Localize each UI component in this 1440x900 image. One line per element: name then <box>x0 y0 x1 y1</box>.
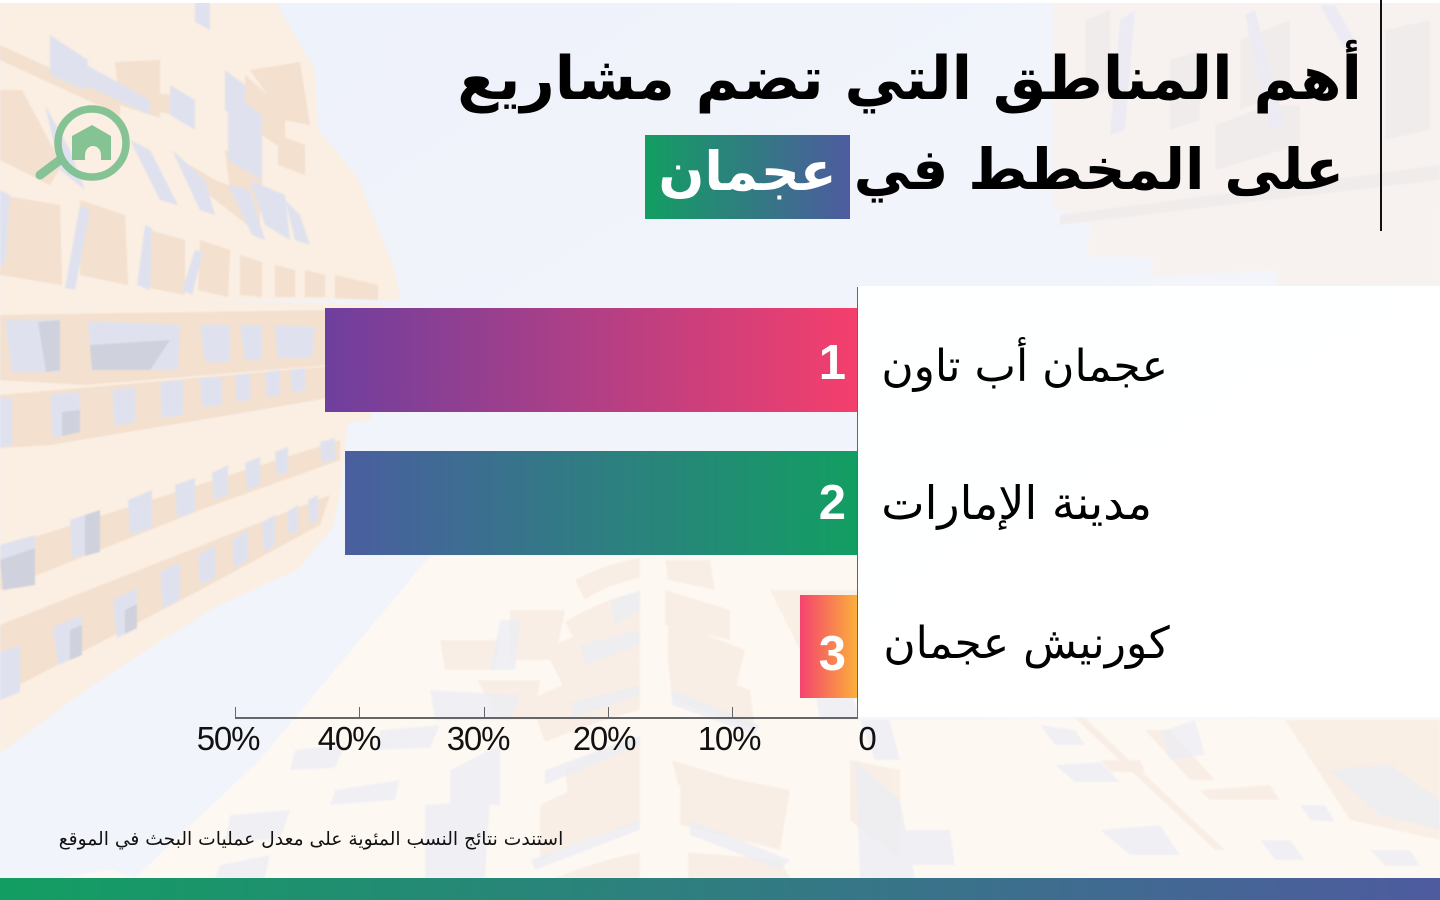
upper left building <box>0 3 400 300</box>
vertical axis line <box>857 287 858 717</box>
axis label 50%: 50% <box>197 720 259 757</box>
title line 1: أهم المناطق التي تضم مشاريع <box>457 45 1362 114</box>
panel: white chart backdrop <box>857 286 1440 717</box>
axis label 20%: 20% <box>573 720 635 757</box>
title <box>457 40 1362 203</box>
axis label 30%: 30% <box>447 720 509 757</box>
bar 2 rank: 2 <box>819 476 846 530</box>
category label 3: كورنيش عجمان <box>883 618 1170 669</box>
sky-side buildings <box>1053 3 1440 285</box>
bar 1 <box>325 308 857 412</box>
row 3 <box>0 535 35 590</box>
title highlight: Ajman: عجمان <box>658 140 837 203</box>
bar 3 rank: 3 <box>819 627 846 681</box>
title highlight: Ajman <box>645 135 850 219</box>
category label 1: عجمان أب تاون <box>881 341 1168 392</box>
row 4 <box>53 615 82 665</box>
axis label 0: 0 <box>858 720 876 757</box>
footnote: استندت نتائج النسب المئوية على معدل عمليات البحث في الموقع <box>59 829 563 850</box>
bottom gradient band <box>0 878 1440 900</box>
lower windows row 1 <box>5 320 60 372</box>
logo icon: magnifier with house <box>36 105 130 181</box>
bar 1 rank: 1 <box>819 336 846 390</box>
center and right building <box>135 556 1440 878</box>
lower window bands <box>0 310 330 385</box>
upper windows <box>50 35 88 90</box>
bar chart <box>235 287 1170 719</box>
axis label 10%: 10% <box>698 720 760 757</box>
center balconies <box>440 558 1440 878</box>
lower left building <box>0 295 385 753</box>
bar 3 <box>800 595 857 698</box>
title vertical rule <box>1380 0 1382 231</box>
axis label 40%: 40% <box>318 720 380 757</box>
upper bays <box>0 90 62 185</box>
category label 2: مدينة الإمارات <box>881 476 1152 530</box>
row 2 <box>50 392 80 438</box>
bar 2 <box>345 451 857 555</box>
horizontal axis line <box>235 717 858 718</box>
title line 2: على المخطط في <box>854 137 1344 203</box>
